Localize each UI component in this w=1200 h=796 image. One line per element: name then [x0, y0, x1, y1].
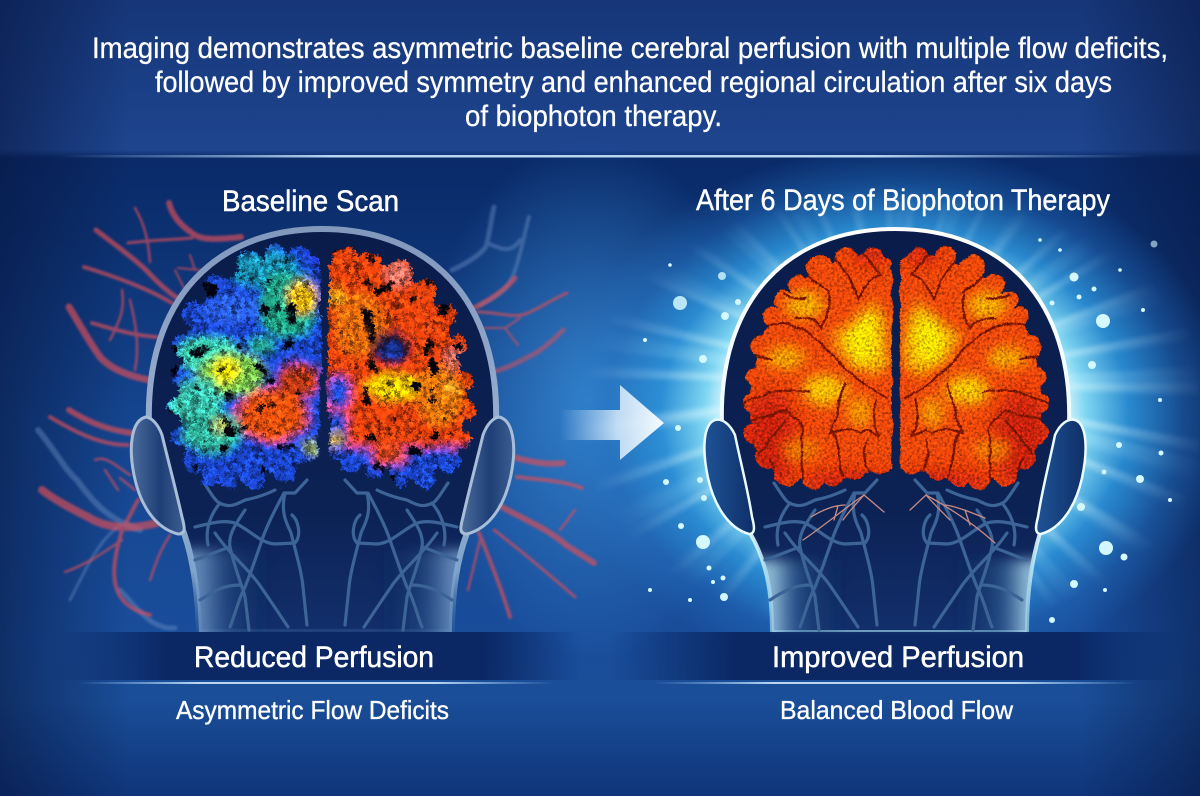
perfusion scan: healed hemispheres	[735, 240, 1057, 495]
left ear	[704, 420, 754, 534]
heading: reduced perfusion: Reduced Perfusion	[194, 641, 434, 674]
particles: light dots	[643, 238, 1172, 623]
head vessels	[765, 480, 1027, 630]
top caption	[92, 32, 1168, 133]
heading: baseline scan: Baseline Scan	[222, 185, 399, 218]
top caption: of biophoton therapy.	[465, 100, 722, 133]
panel: therapy footer	[610, 632, 1180, 725]
arrow	[560, 385, 664, 460]
subheading: deficits: Asymmetric Flow Deficits	[176, 695, 449, 725]
left ear	[131, 417, 184, 534]
right ear	[1036, 420, 1086, 534]
heading: improved perfusion: Improved Perfusion	[772, 641, 1024, 674]
reduced-flow blood vessels	[42, 203, 594, 617]
heading: after therapy: After 6 Days of Biophoton Therapy	[696, 184, 1110, 217]
neck shading	[190, 542, 460, 632]
perfusion scan: left hemisphere	[165, 242, 324, 491]
red capillaries	[803, 495, 995, 543]
after-therapy head	[704, 229, 1086, 650]
top caption: followed by improved symmetry and enhanced regional circulation after six days	[155, 66, 1112, 99]
panel: baseline footer	[50, 632, 580, 725]
head silhouette	[149, 229, 496, 632]
glow: therapy light	[520, 157, 1200, 637]
rays: therapy light burst	[598, 204, 1197, 598]
baseline head	[131, 229, 514, 650]
fading blood vessels	[38, 207, 529, 628]
right ear	[461, 417, 514, 534]
neck shading	[762, 551, 1033, 632]
head vessels	[195, 480, 457, 630]
perfusion scan: right hemisphere	[320, 240, 480, 498]
head silhouette	[722, 229, 1069, 632]
subheading: balanced flow: Balanced Blood Flow	[780, 695, 1013, 725]
